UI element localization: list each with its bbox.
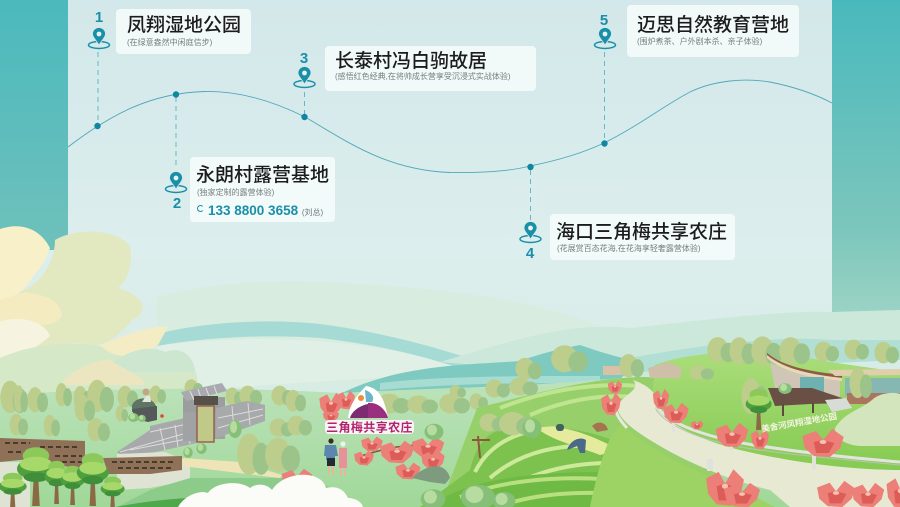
bottom white cloud bbox=[178, 475, 363, 507]
number 2: 2 bbox=[173, 195, 181, 212]
card 5: Maisi nature camp bbox=[627, 5, 799, 57]
route dots bbox=[94, 91, 608, 170]
card 3: Changtai former residence bbox=[325, 46, 536, 91]
terrace below road bbox=[590, 425, 775, 507]
tree line background bbox=[0, 345, 588, 441]
terraced hills bbox=[420, 377, 740, 507]
card 1: Fengxiang wetland park: (在绿意盎然中闲庭信步) bbox=[127, 38, 212, 47]
card 5: Maisi nature camp: (围炉煮茶、户外剧本杀、亲子体验) bbox=[637, 37, 762, 46]
card 3: Changtai former residence: 长泰村冯白驹故居 bbox=[335, 51, 487, 72]
card 2: Yonglang camp bbox=[190, 157, 335, 222]
map pin 4 bbox=[520, 222, 541, 242]
foreground trees left bbox=[0, 433, 300, 507]
right teal side panel bbox=[832, 0, 900, 352]
pale tree cluster right bbox=[835, 393, 900, 446]
map pin 2 bbox=[166, 172, 186, 192]
wetland park building bbox=[767, 353, 900, 416]
fence flowers bbox=[601, 380, 900, 507]
park sign text: 美舍河凤翔湿地公园 bbox=[761, 411, 838, 434]
winding road bbox=[618, 380, 900, 507]
number 4: 4 bbox=[526, 245, 534, 262]
card 2: Yonglang camp: 133 8800 3658 (刘总) bbox=[208, 203, 323, 218]
village houses bbox=[603, 336, 899, 430]
map pin 5 bbox=[594, 28, 616, 48]
card 2: Yonglang camp: (独家定制的露营体验) bbox=[197, 188, 274, 197]
right green hill bbox=[650, 353, 900, 472]
stone gate wall bbox=[117, 383, 265, 458]
map pin 1 bbox=[88, 28, 110, 48]
statue bbox=[128, 388, 164, 422]
card 4: Haikou bougainvillea farm: 海口三角梅共享农庄 bbox=[556, 222, 727, 243]
card 5: Maisi nature camp: 迈思自然教育营地 bbox=[637, 15, 789, 36]
card 1: Fengxiang wetland park: 凤翔湿地公园 bbox=[127, 15, 241, 36]
road fence bbox=[616, 400, 900, 471]
blossom branch and shrubs centre bbox=[282, 391, 450, 489]
card 1: Fengxiang wetland park bbox=[116, 9, 251, 54]
map pin 3 bbox=[294, 66, 315, 88]
meadow ground bbox=[0, 378, 900, 507]
farmers and bushes on terraces bbox=[421, 378, 667, 507]
couple bbox=[324, 438, 347, 476]
distant pale hills bbox=[157, 281, 900, 396]
number 5: 5 bbox=[600, 12, 608, 29]
farm name banner: 三角梅共享农庄 bbox=[326, 420, 413, 434]
dashed connectors bbox=[98, 52, 604, 220]
sand path and green field bbox=[115, 458, 350, 507]
route curve bbox=[68, 80, 832, 173]
card 4: Haikou bougainvillea farm bbox=[550, 214, 735, 260]
farm logo bbox=[348, 386, 388, 418]
number 1: 1 bbox=[95, 9, 103, 26]
card 2: Yonglang camp: 永朗村露营基地 bbox=[196, 165, 329, 186]
number 3: 3 bbox=[300, 50, 308, 67]
brown stone walls bbox=[0, 438, 190, 507]
card 4: Haikou bougainvillea farm: (花展赏百态花海,在花海享轻奢露营体验) bbox=[557, 244, 701, 253]
left clouds bbox=[0, 226, 200, 400]
left teal side panel bbox=[0, 0, 68, 250]
card 3: Changtai former residence: (感悟红色经典,在将帅成长营享受沉浸式实战体验) bbox=[335, 72, 511, 81]
